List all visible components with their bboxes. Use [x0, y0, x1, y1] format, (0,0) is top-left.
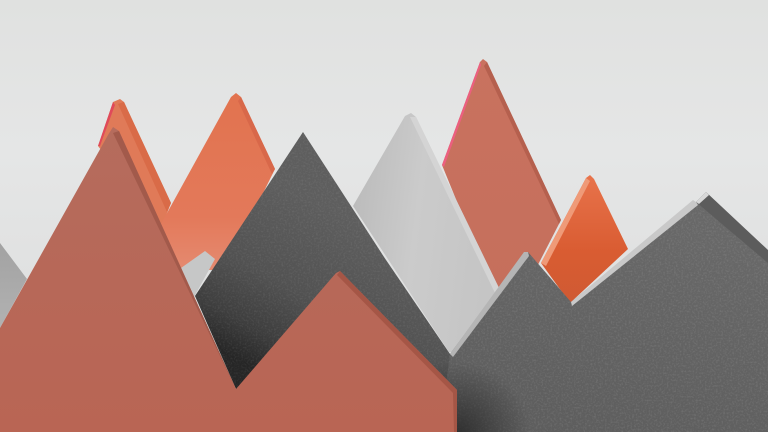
back orange peak left — [98, 99, 171, 226]
dark grey centre peak — [195, 132, 460, 432]
tall salmon peak — [442, 59, 561, 295]
front salmon mountain range — [0, 127, 457, 432]
dark grey mountain range right — [440, 200, 768, 432]
orange peak right — [541, 175, 628, 303]
shadow behind front mountain — [381, 361, 531, 432]
light grey peak — [353, 113, 499, 352]
far left grey peak — [0, 243, 27, 328]
dark grey back ridge right — [696, 192, 768, 270]
back orange peak centre — [161, 93, 275, 270]
small light grey peak — [181, 251, 215, 297]
